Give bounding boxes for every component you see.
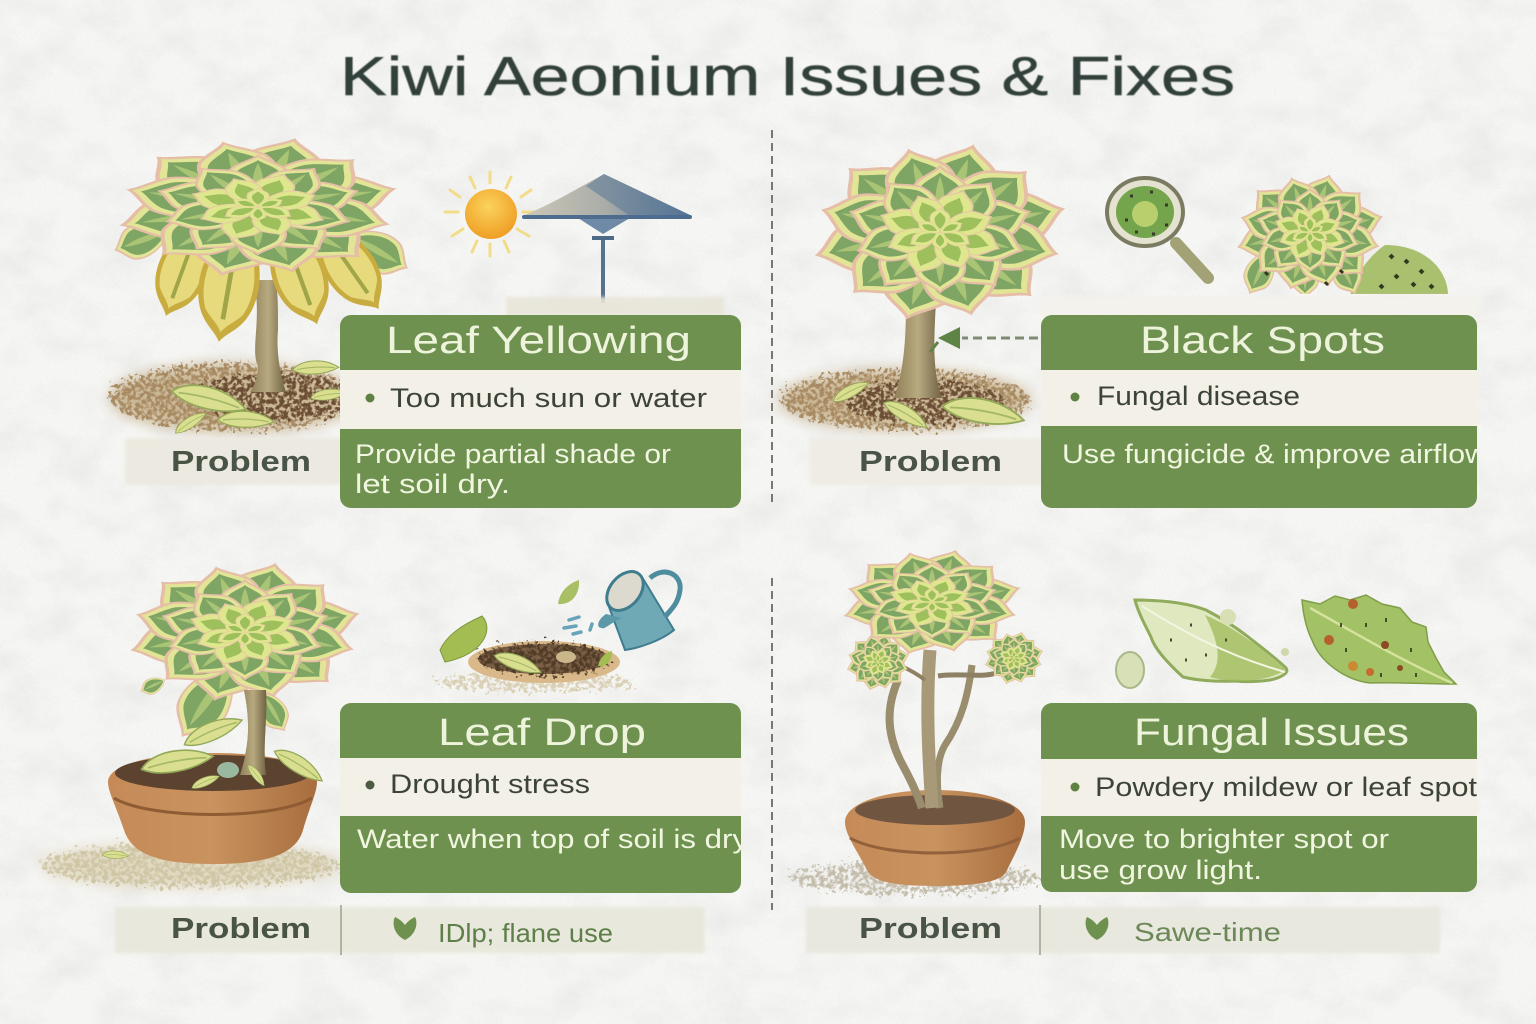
bar: problem and tip: IDlp; flane use (438, 918, 613, 948)
section: fungal issues (790, 546, 1478, 955)
icon: dry saucer and falling leaves (435, 580, 635, 692)
plant: aeonium with damaged stem (780, 137, 1075, 432)
plant: yellowing aeonium (108, 133, 418, 437)
heading: Leaf Yellowing (386, 320, 691, 362)
icon: watering can (564, 565, 680, 650)
panel: leaf yellowing (340, 315, 741, 508)
cause text: Powdery mildew or leaf spot (1095, 772, 1478, 802)
bullet (1070, 392, 1080, 402)
heading: Leaf Drop (438, 712, 646, 754)
panel: leaf drop (340, 703, 749, 893)
panel: black spots (1041, 315, 1488, 508)
plant: potted aeonium (40, 558, 369, 887)
section: black spots (780, 137, 1488, 508)
vertical divider top (771, 130, 773, 505)
fix text: Move to brighter spot or (1059, 824, 1389, 854)
bar: problem and tip: Problem (171, 913, 311, 945)
bullet (366, 780, 374, 790)
icon: sun (445, 172, 536, 256)
section: leaf drop (40, 558, 749, 955)
bar: problem and tip (115, 905, 705, 955)
icon: mildew leaf (1116, 600, 1289, 688)
fix text: Use fungicide & improve airflow (1062, 439, 1488, 469)
icon: spotted leaf (1302, 595, 1456, 684)
cause text: Too much sun or water (390, 383, 707, 413)
fix text: Water when top of soil is dry (357, 824, 749, 854)
label: problem (125, 438, 341, 485)
cause text: Fungal disease (1097, 381, 1300, 411)
label: problem (810, 438, 1042, 485)
shade base band (506, 297, 724, 316)
icon: shade umbrella (522, 174, 692, 303)
bullet (366, 394, 374, 402)
bar: problem and tip: Problem (859, 913, 1002, 945)
fix text line 2: use grow light. (1059, 855, 1262, 885)
heading: Black Spots (1140, 320, 1385, 362)
panel top band (1040, 296, 1480, 316)
cause text: Drought stress (390, 769, 590, 799)
arrow: to stem (930, 327, 1038, 352)
label: problem: Problem (171, 446, 311, 478)
bar: problem and tip (806, 905, 1440, 955)
bullet (1070, 782, 1080, 792)
panel: fungal issues (1041, 703, 1478, 892)
icon: magnifier (1107, 178, 1208, 278)
icon: spotted plant (1237, 174, 1448, 294)
label: problem: Problem (859, 446, 1002, 478)
fix text line 2: let soil dry. (355, 469, 510, 499)
title: Kiwi Aeonium Issues & Fixes (340, 45, 1235, 107)
bar: problem and tip: Sawe-time (1134, 917, 1281, 947)
fix text: Provide partial shade or (355, 439, 671, 469)
plant: multi-stem aeonium (790, 546, 1046, 895)
vertical divider bottom (771, 578, 773, 910)
section: leaf yellowing (108, 133, 741, 508)
heading: Fungal Issues (1134, 712, 1409, 754)
